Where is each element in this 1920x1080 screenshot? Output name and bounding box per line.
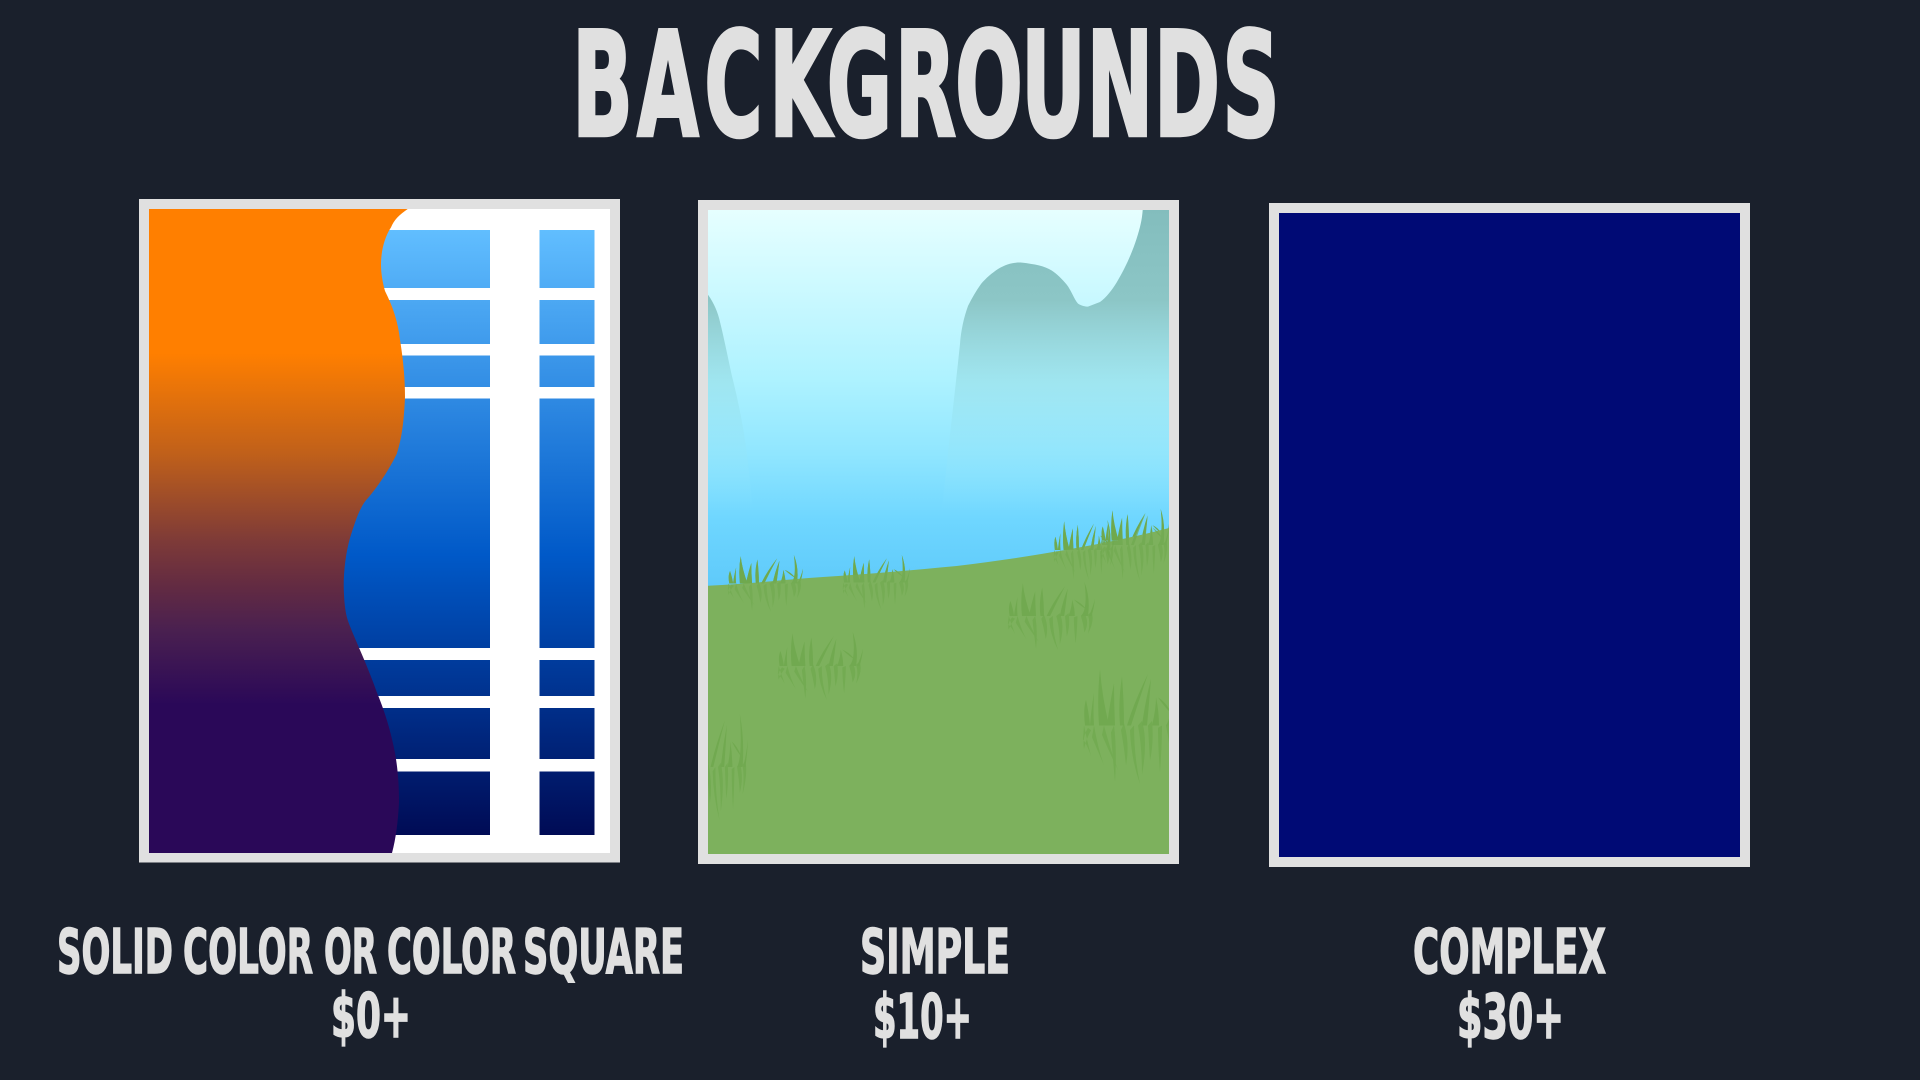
green ground xyxy=(708,528,1169,854)
label: complex: COMPLEX xyxy=(1413,916,1606,988)
title: BACKGROUNDS xyxy=(572,0,1280,170)
price: $0+: $0+ xyxy=(331,980,411,1052)
blue gradient color squares xyxy=(330,230,594,835)
price: $10+: $10+ xyxy=(873,981,972,1053)
label: solid color or color square: SOLID xyxy=(57,916,173,988)
orange to purple wavy shape xyxy=(149,209,408,853)
grass tufts on the hill xyxy=(681,509,1182,820)
sky xyxy=(708,210,1169,610)
label: solid color or color square: SQUARE xyxy=(523,916,684,988)
panel: solid color or color square xyxy=(139,199,620,862)
grass tufts on horizon xyxy=(728,509,1169,585)
panel frame xyxy=(139,199,620,862)
label: simple: SIMPLE xyxy=(860,916,1010,988)
label: solid color or color square: COLOR xyxy=(183,916,313,988)
label: solid color or color square: OR xyxy=(324,916,377,988)
panel: complex xyxy=(1269,203,1750,867)
misty mountains xyxy=(708,210,1169,416)
solid navy fill xyxy=(1279,213,1740,857)
white canvas xyxy=(149,209,610,853)
panel frame xyxy=(1269,203,1750,867)
label: solid color or color square: COLOR xyxy=(387,916,516,988)
label: solid color or color square xyxy=(57,916,684,988)
panel frame xyxy=(698,200,1179,864)
panel: simple xyxy=(681,200,1182,864)
price: $30+: $30+ xyxy=(1457,981,1564,1053)
